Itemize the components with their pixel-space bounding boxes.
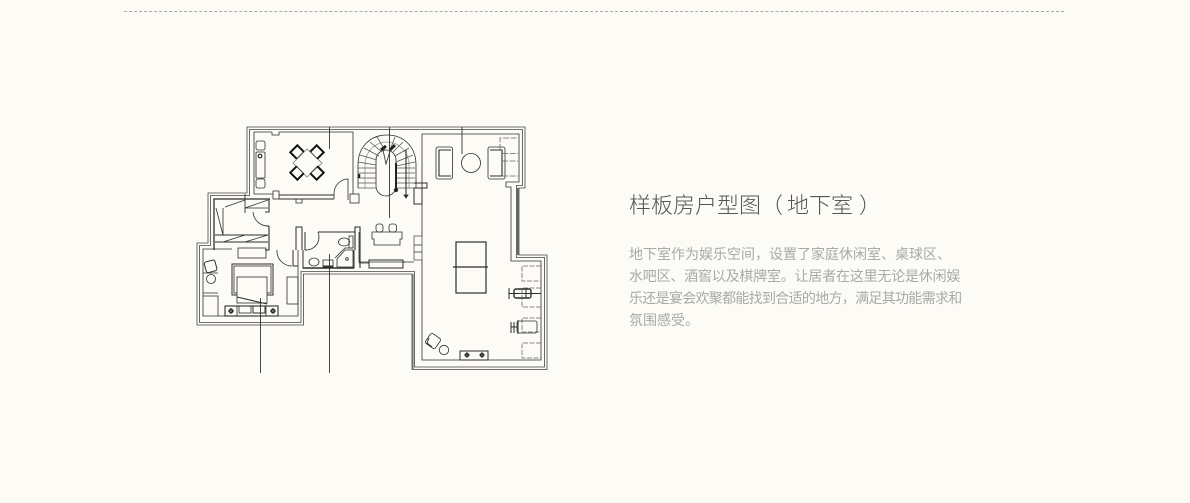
billiard table bbox=[453, 242, 488, 293]
shower bbox=[335, 248, 353, 267]
bar counter bbox=[359, 224, 422, 268]
dashed top divider bbox=[124, 11, 1064, 12]
room: bedroom bbox=[203, 248, 298, 316]
low cabinet bbox=[460, 351, 488, 360]
room: stair hall and wine store bbox=[214, 199, 270, 250]
description text: 乐还是宴会欢聚都能找到合适的地方，满足其功能需求和 bbox=[629, 290, 962, 306]
title: 样板房户型图（地下室 ） bbox=[629, 193, 881, 218]
leader lines bbox=[245, 127, 462, 373]
toilet bbox=[338, 236, 353, 248]
description text: 地下室作为娱乐空间，设置了家庭休闲室、桌球区、 bbox=[629, 246, 951, 262]
sofa and chairs bbox=[256, 141, 265, 188]
room: lounge and billiards bbox=[414, 134, 541, 360]
description text bbox=[629, 246, 962, 328]
room: bathroom bbox=[296, 227, 360, 268]
armchair and side table bbox=[204, 260, 217, 284]
exterior walls bbox=[197, 127, 547, 370]
black chair bbox=[509, 288, 541, 299]
grey chair bbox=[511, 320, 537, 334]
room: game room bbox=[254, 132, 359, 203]
seating cubes bbox=[522, 266, 541, 358]
spiral stair bbox=[358, 135, 416, 198]
description text: 水吧区、酒窖以及棋牌室。让居者在这里无论是休闲娱 bbox=[629, 268, 960, 284]
bedside cabinet bbox=[225, 306, 278, 316]
description text: 氛围感受。 bbox=[629, 312, 699, 328]
corner armchair bbox=[425, 333, 449, 355]
card table bbox=[290, 145, 324, 180]
right sofa bbox=[488, 138, 518, 179]
left sofa bbox=[436, 147, 452, 179]
bed bbox=[232, 264, 273, 304]
